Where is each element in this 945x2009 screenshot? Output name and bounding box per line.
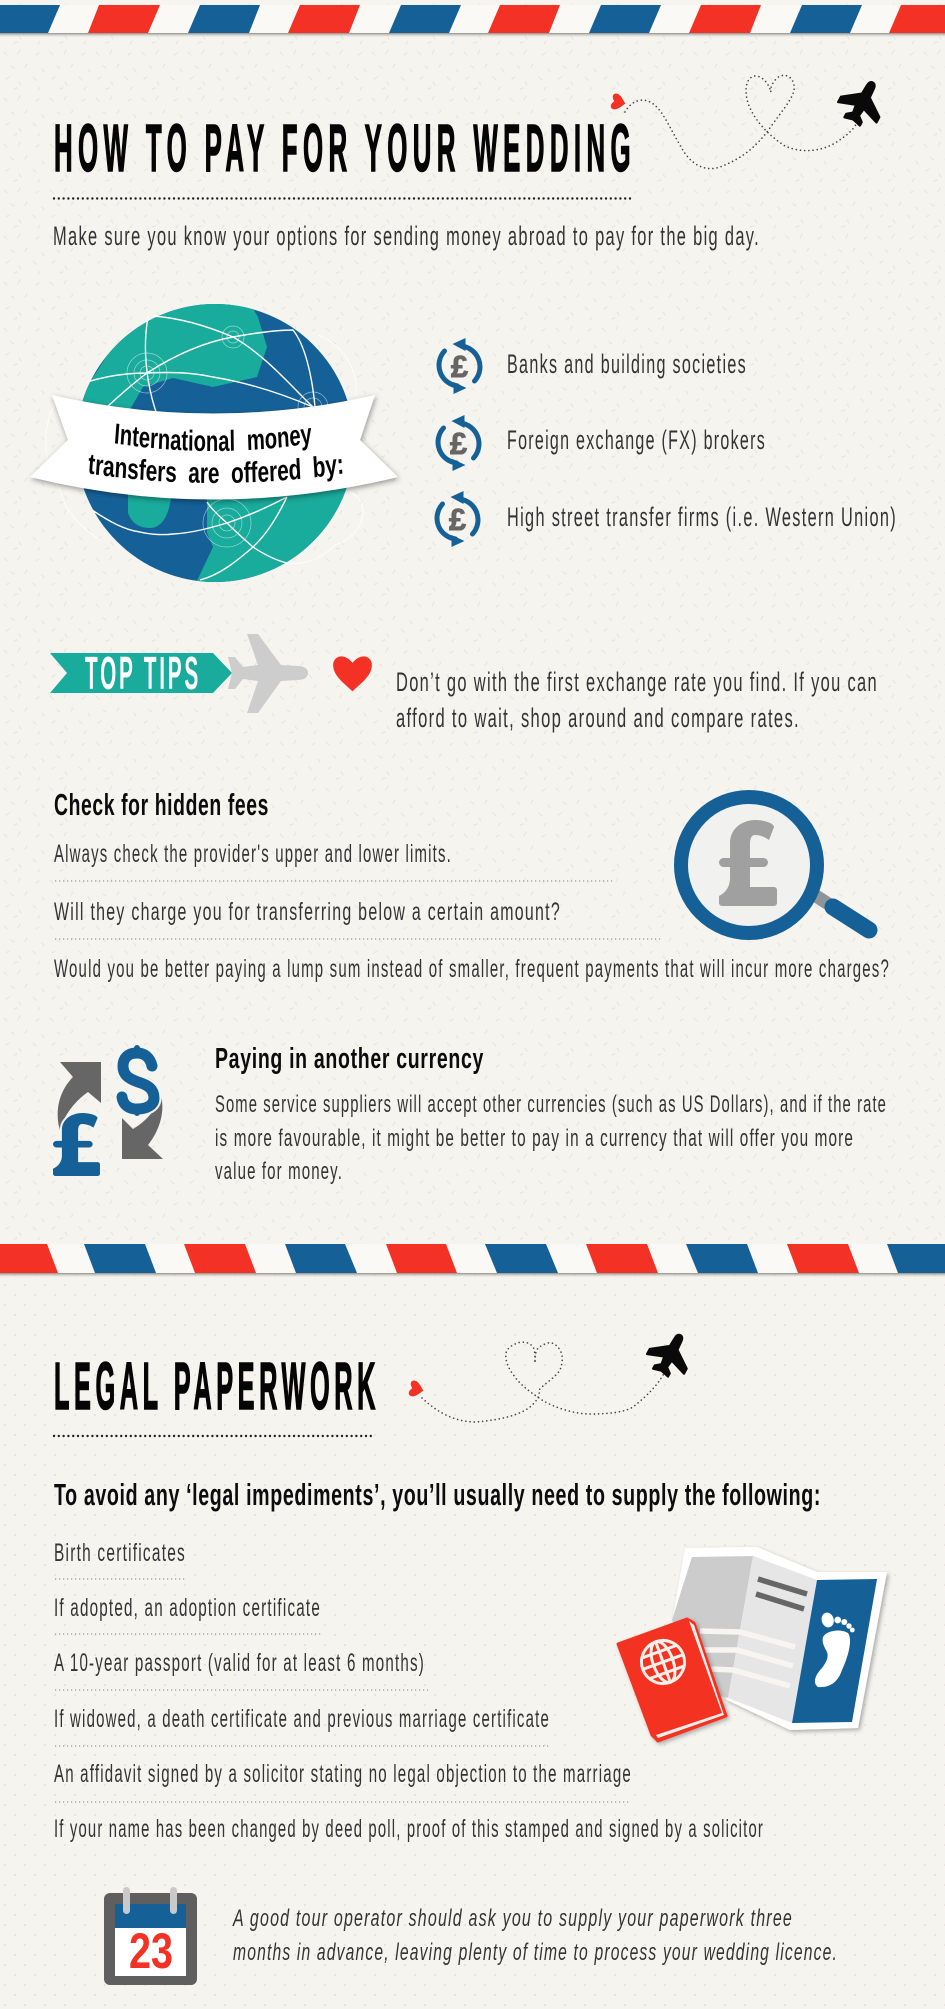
icon: exchange pound 1: £ (451, 349, 468, 384)
title dotted rule (54, 1435, 372, 1437)
icon: exchange pound 3 (437, 491, 478, 547)
title dotted rule (54, 197, 632, 200)
flight path with heart and plane (408, 1326, 699, 1422)
icon: magnifying glass (681, 797, 869, 933)
icon: pound sign (719, 820, 777, 906)
globe (46, 300, 363, 590)
icon: calendar (104, 1887, 197, 1985)
icon: exchange pound 2: £ (450, 426, 467, 461)
folded document (672, 1547, 887, 1730)
banner text: International money (115, 424, 312, 452)
icon: red heart (610, 93, 627, 111)
icon: grey plane (228, 634, 308, 713)
top tips ribbon (50, 647, 232, 699)
hidden fees text: Will they charge you for transferring below a certain amount? (54, 898, 561, 926)
paperwork list: Birth certificates (54, 1539, 186, 1567)
paperwork list: If widowed, a death certificate and previous marriage certificate (54, 1705, 550, 1733)
icon: red heart (333, 656, 372, 691)
another currency text (215, 1091, 887, 1185)
list item: banks: Banks and building societies (507, 349, 747, 379)
flight path with heart and plane (610, 72, 892, 169)
hidden fees text: Always check the provider's upper and lower limits. (54, 840, 452, 868)
illustration: passport and folded document (618, 1547, 887, 1741)
icon: exchange pound 3: £ (449, 502, 466, 537)
paperwork list: If adopted, an adoption certificate (54, 1594, 321, 1622)
banner text: transfers are offered by: (88, 454, 342, 484)
icon: calendar: 23 (129, 1923, 173, 1979)
infographic: LEGAL PAPERWORK (54, 1349, 380, 1424)
top tip text (396, 667, 878, 733)
top airmail stripe (0, 5, 945, 38)
paperwork list: A 10-year passport (valid for at least 6 months) (54, 1649, 425, 1677)
icon: currency exchange (53, 1048, 163, 1176)
middle airmail stripe (0, 1244, 945, 1278)
ribbon banner (30, 395, 398, 500)
icon: black plane (833, 72, 892, 132)
heading: hidden fees: Check for hidden fees (54, 787, 269, 822)
banner text (88, 424, 342, 484)
icon: black plane (642, 1326, 699, 1383)
another currency text: value for money. (215, 1158, 343, 1185)
passport (618, 1619, 726, 1741)
heading: another currency: Paying in another currency (215, 1043, 484, 1075)
icon: exchange pound 1 (439, 338, 480, 394)
top tips ribbon: TOP TIPS (85, 647, 201, 699)
icon: red heart (408, 1380, 425, 1398)
icon: exchange pound 2 (438, 415, 479, 471)
italic note (232, 1905, 838, 1966)
hidden fees text (54, 840, 890, 983)
globe with banner (30, 304, 400, 582)
paperwork list (54, 1539, 764, 1843)
list item: fx brokers: Foreign exchange (FX) brokers (507, 425, 766, 455)
